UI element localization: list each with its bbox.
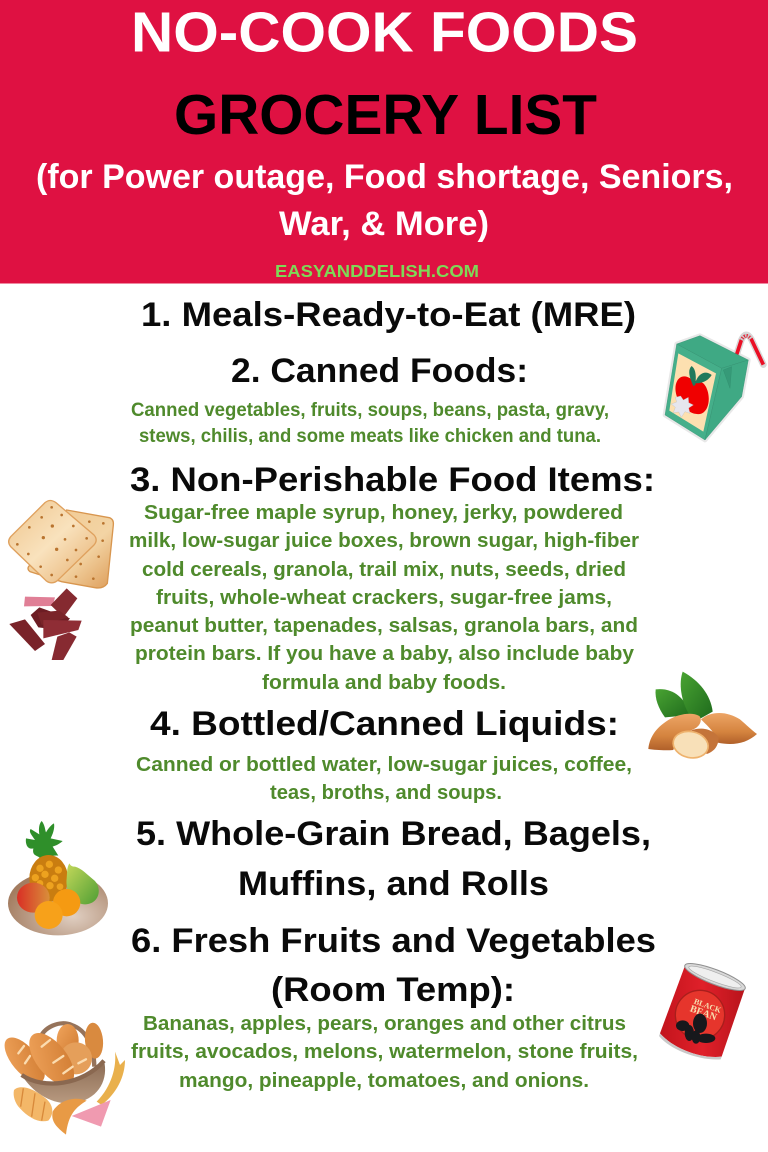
item 3 description: formula and baby foods. — [262, 672, 506, 694]
subtitle: War, & More) — [279, 205, 489, 243]
item 3 description: milk, low-sugar juice boxes, brown sugar, high-fiber — [129, 530, 639, 552]
icon: black bean can — [659, 959, 748, 1059]
icon: fruit plate — [8, 821, 108, 935]
item 3 description: peanut butter, tapenades, salsas, granola bars, and — [130, 615, 638, 637]
item 1 heading: 1. Meals-Ready-to-Eat (MRE) — [141, 296, 636, 334]
icon: black bean can: BEAN — [688, 1003, 719, 1024]
item 6 description: Bananas, apples, pears, oranges and other citrus — [143, 1013, 626, 1035]
item 6 heading — [131, 922, 656, 1009]
item 6 heading: 6. Fresh Fruits and Vegetables — [131, 922, 656, 960]
item 6 description: fruits, avocados, melons, watermelon, stone fruits, — [131, 1041, 638, 1063]
item 5 heading — [136, 815, 651, 903]
icon: black bean can: BLACK — [693, 997, 723, 1015]
website credit: EASYANDDELISH.COM — [275, 261, 479, 281]
title line: NO-COOK FOODS: NO-COOK FOODS — [131, 0, 638, 64]
item 2 description: stews, chilis, and some meats like chicken and tuna. — [139, 426, 601, 447]
item 3 description — [129, 502, 639, 694]
item 6 description: mango, pineapple, tomatoes, and onions. — [179, 1070, 589, 1092]
item 4 heading: 4. Bottled/Canned Liquids: — [150, 705, 619, 743]
item 2 heading: 2. Canned Foods: — [231, 352, 528, 390]
item 3 heading: 3. Non-Perishable Food Items: — [130, 461, 655, 499]
item 3 description: Sugar-free maple syrup, honey, jerky, powdered — [144, 502, 623, 524]
item 3 description: cold cereals, granola, trail mix, nuts, seeds, dried — [142, 559, 626, 581]
subtitle: (for Power outage, Food shortage, Seniors, — [36, 158, 733, 196]
icon: bread basket — [0, 1022, 125, 1135]
item 4 description: teas, broths, and soups. — [270, 782, 502, 804]
item 6 description — [131, 1013, 638, 1092]
item 4 description — [136, 754, 632, 804]
item 3 description: protein bars. If you have a baby, also include baby — [135, 643, 635, 665]
subtitle — [36, 158, 733, 243]
icon: crackers and jerky — [9, 500, 113, 660]
item 4 description: Canned or bottled water, low-sugar juices, coffee, — [136, 754, 632, 776]
item 2 description: Canned vegetables, fruits, soups, beans, pasta, gravy, — [131, 400, 609, 421]
header banner — [0, 0, 768, 284]
item 5 heading: 5. Whole-Grain Bread, Bagels, — [136, 815, 651, 853]
item 5 heading: Muffins, and Rolls — [238, 865, 549, 903]
title line: GROCERY LIST: GROCERY LIST — [174, 83, 597, 147]
item 2 description — [131, 400, 609, 447]
item 6 heading: (Room Temp): — [271, 971, 515, 1009]
icon: juice box — [665, 335, 763, 440]
icon: almonds with leaves — [648, 672, 757, 761]
item 3 description: fruits, whole-wheat crackers, sugar-free jams, — [156, 587, 612, 609]
